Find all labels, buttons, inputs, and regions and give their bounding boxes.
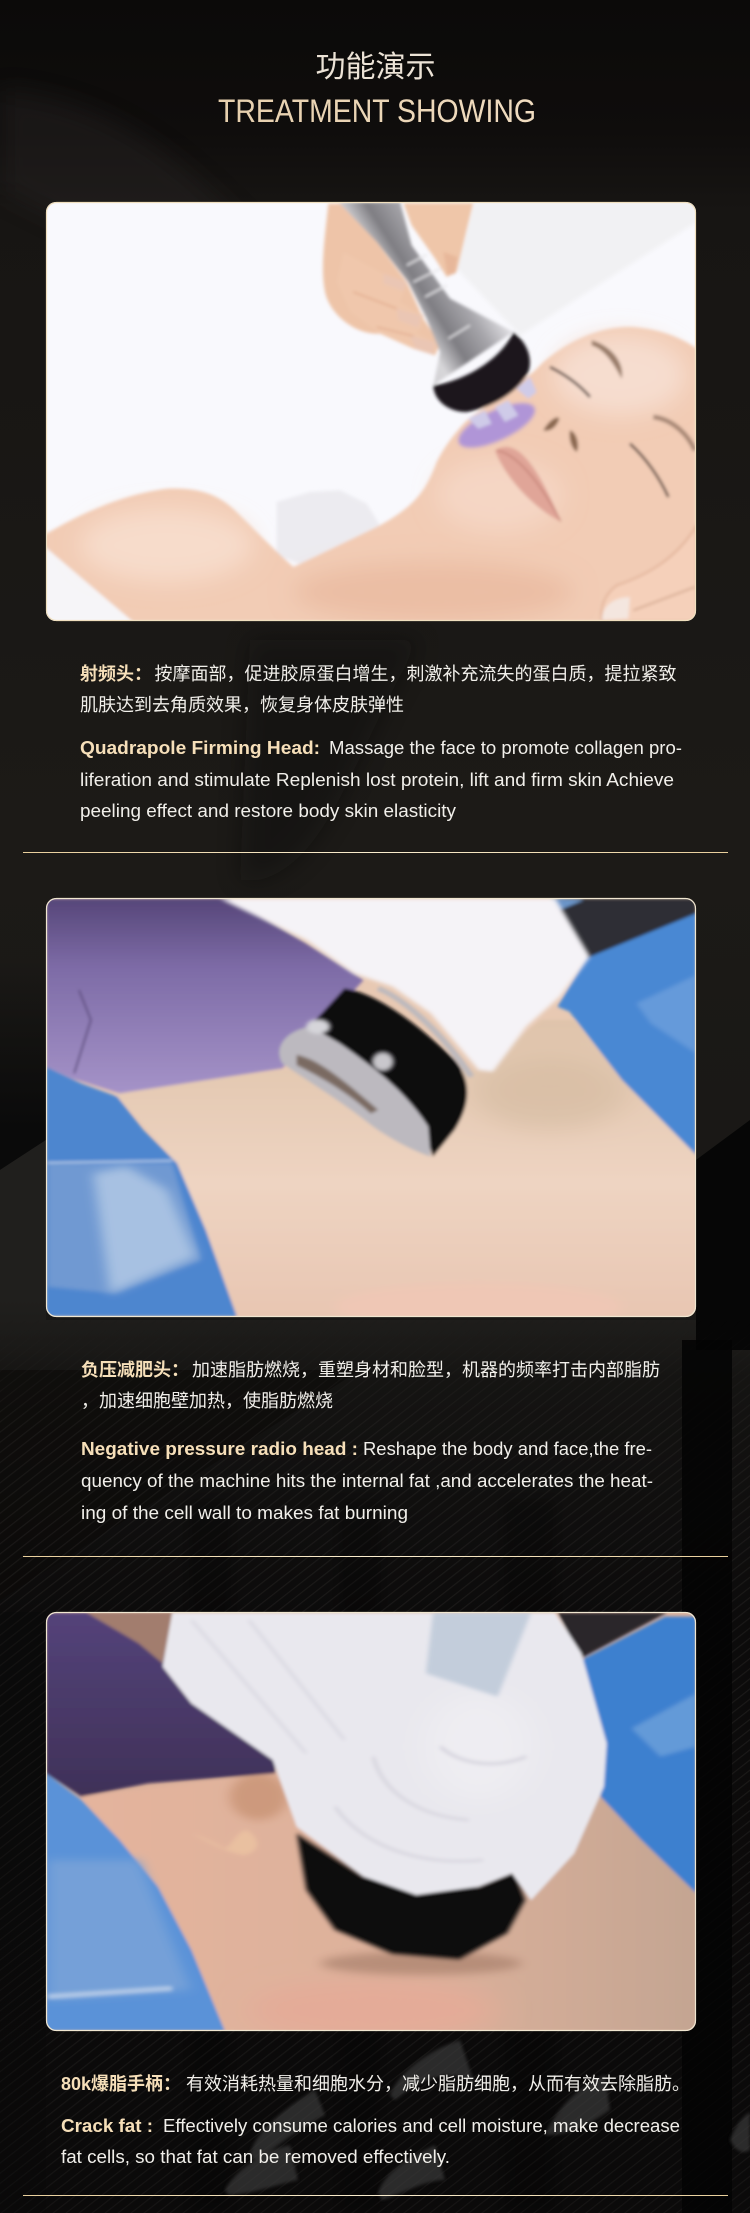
panel border: photo one <box>46 202 696 620</box>
text block: quadrapole firming head: 肌肤达到去角质效果，恢复身体皮肤弹性 <box>80 695 404 715</box>
text block: negative pressure radio head: Negative pressure radio head : <box>81 1439 358 1459</box>
finger creases <box>353 292 413 336</box>
text block: quadrapole firming head <box>80 664 682 821</box>
right blue drape <box>557 913 696 1155</box>
purple backdrop <box>46 1612 275 1797</box>
text block: quadrapole firming head: 射频头： <box>80 664 152 684</box>
left blue drape <box>46 1067 237 1317</box>
title: Chinese heading: 功能演示 <box>316 51 436 84</box>
black treatment head <box>297 1833 525 1959</box>
text block: negative pressure radio head: quency of the machine hits the internal fat ,and accelerates the heat- <box>81 1471 653 1491</box>
panel border: photo three <box>46 1612 696 2030</box>
text block: quadrapole firming head: 按摩面部，促进胶原蛋白增生，刺激补充流失的蛋白质，提拉紧致 <box>154 664 676 684</box>
text block: quadrapole firming head: liferation and stimulate Replenish lost protein, lift and firm skin Achieve <box>80 770 674 790</box>
device black body <box>306 988 467 1157</box>
thumb <box>403 203 473 277</box>
text block: negative pressure radio head: 加速脂肪燃烧，重塑身材和脸型，机器的频率打击内部脂肪 <box>192 1360 660 1380</box>
probe tips <box>468 377 537 429</box>
handheld wand <box>338 202 513 385</box>
nose <box>543 417 578 452</box>
upper brow <box>592 340 622 379</box>
text block: negative pressure radio head: ，加速细胞壁加热，使脂肪燃烧 <box>81 1391 333 1411</box>
upper eye <box>550 367 590 397</box>
text block: crack fat: Crack fat : <box>61 2116 153 2136</box>
white glove <box>163 1612 607 1900</box>
text block: quadrapole firming head: Quadrapole Firming Head: <box>80 738 320 758</box>
chest highlight <box>80 509 253 582</box>
right blue drape <box>581 1617 696 1893</box>
device silver ring <box>279 1027 431 1157</box>
abdomen skin <box>81 1773 696 2031</box>
towel fold <box>457 202 697 335</box>
white glove <box>220 898 590 1072</box>
neck shadow <box>293 562 573 622</box>
text block: quadrapole firming head: Massage the face to promote collagen pro- <box>329 738 682 758</box>
panel border: photo two <box>46 898 696 1316</box>
lower brow <box>653 417 695 450</box>
title: English heading: TREATMENT SHOWING <box>218 93 536 129</box>
purple backdrop <box>46 898 364 1093</box>
text block: negative pressure radio head: ing of the cell wall to makes fat burning <box>81 1503 408 1523</box>
three fingers <box>386 314 424 351</box>
panel: photo of 80k crack fat handle on abdomen <box>46 1612 696 2040</box>
handle <box>426 1612 531 1697</box>
top right dark corner <box>557 1612 668 1658</box>
text block: crack fat: 有效消耗热量和细胞水分，减少脂肪细胞，从而有效去除脂肪。 <box>186 2074 690 2094</box>
probe glow <box>456 401 537 450</box>
lower eye <box>630 444 668 497</box>
chest, neck and face skin <box>43 327 697 622</box>
pillow <box>277 490 380 564</box>
sheet under shoulder <box>46 612 54 621</box>
navel <box>191 1830 257 1855</box>
panel: photo of quadrapole firming head on face <box>43 202 697 622</box>
silver edge of device <box>378 988 471 1077</box>
text block: crack fat <box>61 2074 690 2167</box>
text block: quadrapole firming head: peeling effect and restore body skin elasticity <box>80 801 456 821</box>
client's supporting hand <box>601 525 697 622</box>
abdomen skin <box>115 1020 696 1317</box>
panel: photo of negative pressure head on abdomen <box>46 898 696 1330</box>
wand rings <box>407 255 470 339</box>
finger nails <box>383 274 435 355</box>
text block: crack fat: Effectively consume calories and cell moisture, make decrease <box>163 2116 680 2136</box>
text block: negative pressure radio head: Reshape the body and face,the fre- <box>363 1439 652 1459</box>
text block: crack fat: 80k爆脂手柄： <box>61 2074 181 2094</box>
wand black head <box>433 332 530 412</box>
top right dark corner <box>550 898 696 958</box>
lips <box>495 447 561 521</box>
text block: negative pressure radio head <box>81 1360 660 1523</box>
left blue drape <box>46 1773 225 2031</box>
chin highlight <box>442 460 558 530</box>
text block: crack fat: fat cells, so that fat can be removed effectively. <box>61 2147 450 2167</box>
forearm <box>86 1612 175 1663</box>
forehead highlight <box>553 335 687 415</box>
text block: negative pressure radio head: 负压减肥头： <box>81 1360 189 1380</box>
operator hand palm <box>323 204 440 355</box>
